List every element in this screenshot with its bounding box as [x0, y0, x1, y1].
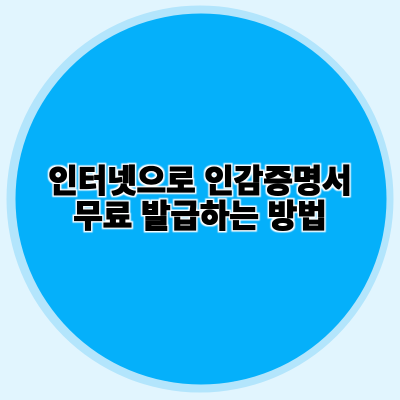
title: 인터넷으로 인감증명서: [48, 163, 352, 199]
title: 무료 발급하는 방법: [73, 198, 327, 234]
title: [48, 163, 352, 234]
